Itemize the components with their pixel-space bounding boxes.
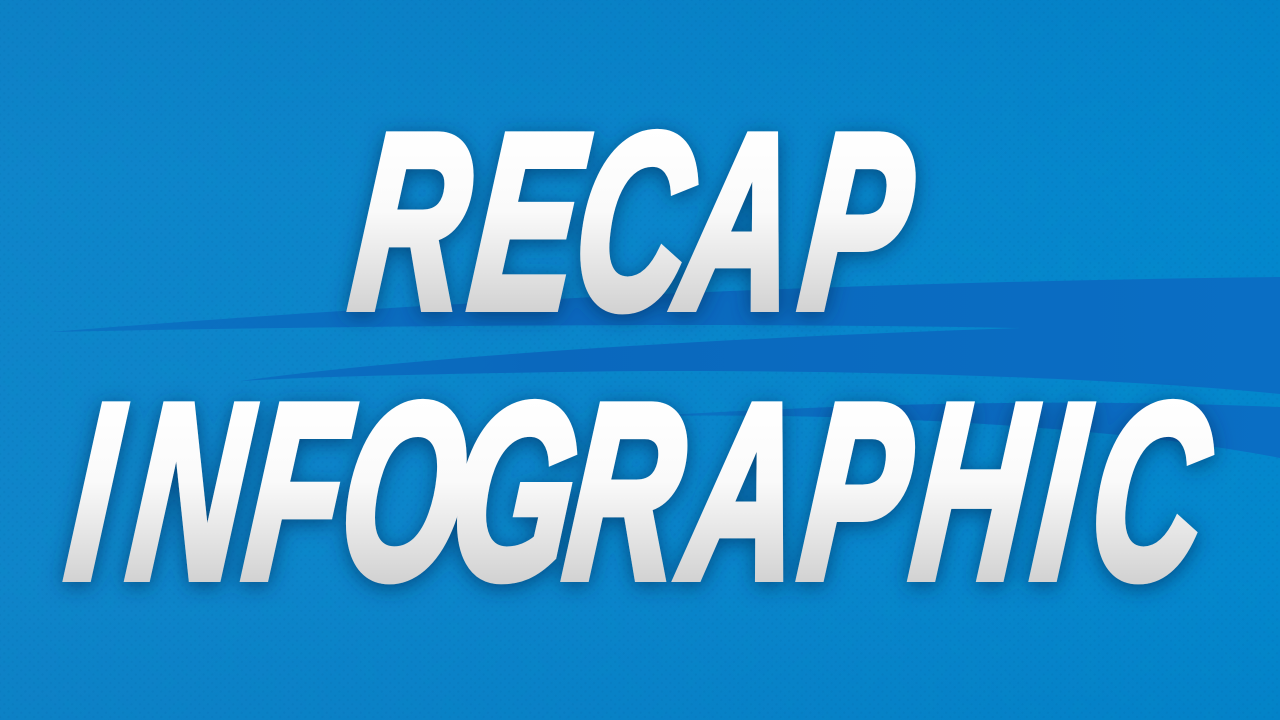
swoosh: upper and lower blue streaks — [50, 277, 1280, 458]
title: INFOGRAPHIC: INFOGRAPHIC — [59, 353, 1221, 630]
title: RECAP: RECAP — [343, 83, 923, 360]
